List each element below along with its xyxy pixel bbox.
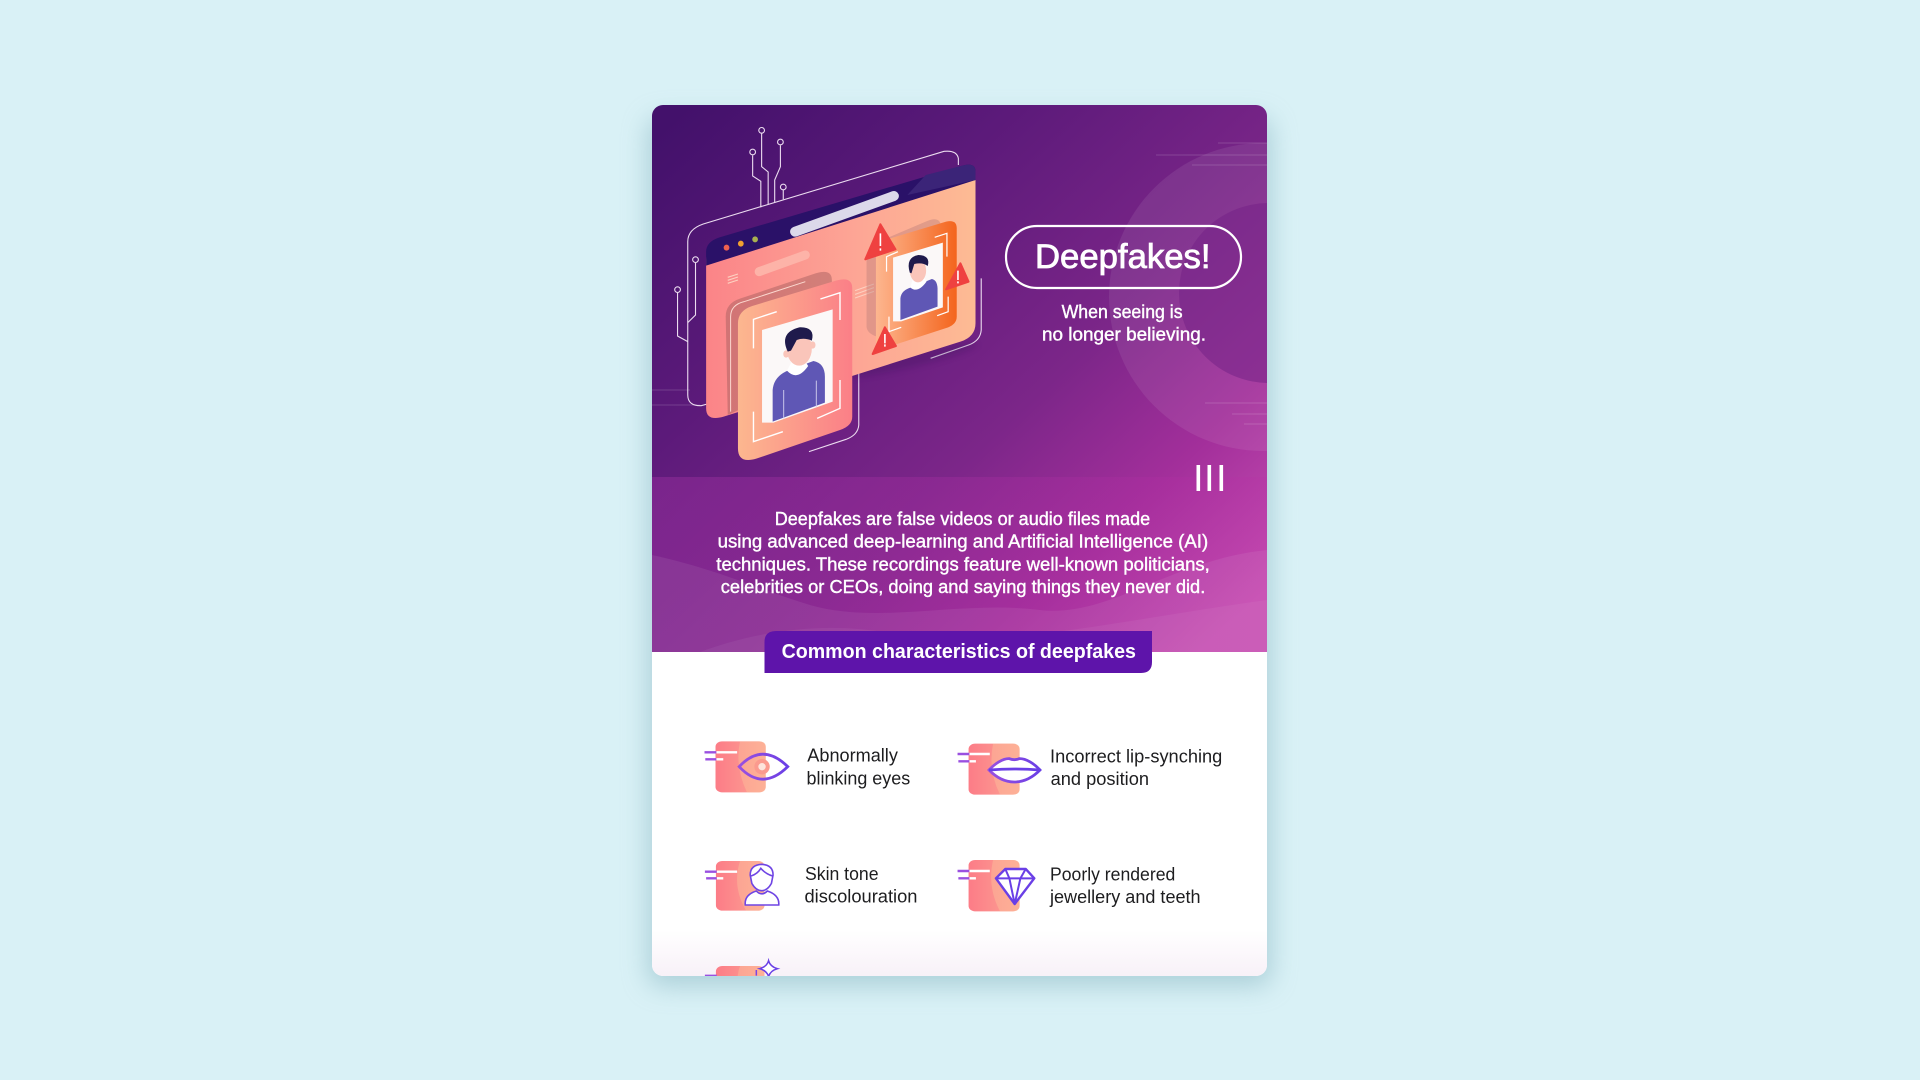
window dots [724,236,758,251]
window shadow [855,342,975,380]
tagline: When seeing is [1062,302,1183,322]
title pill [1006,226,1241,288]
pill outline [1006,226,1241,288]
infographic card [652,105,1267,976]
label: eyes [806,745,910,788]
decorative inner circle [1179,203,1267,383]
icon: diamond [958,860,1034,911]
characteristics icons [704,741,1040,1006]
icon: eye [704,741,788,792]
label: jewellery: Poorly rendered [1050,863,1175,884]
circuit lines [675,127,981,452]
label: lips: and position [1051,768,1149,789]
icon: person [705,861,779,911]
label: lips [1050,745,1222,789]
intro paragraph: Deepfakes are false videos or audio files made [775,508,1150,529]
right card shadow [867,219,941,337]
label: jewellery: jewellery and teeth [1049,886,1201,907]
photo [762,309,833,423]
intro paragraph [716,508,1210,597]
label: skin: discolouration [804,886,918,907]
frame brackets [753,293,840,442]
label: skin: Skin tone [805,863,878,884]
small pill [759,255,805,272]
back card shadow [726,272,832,415]
heading bar [764,631,1152,673]
card bottom fade [652,957,1267,976]
label: jewellery [1049,863,1201,907]
tagline [1042,302,1206,345]
label: eyes: blinking eyes [806,767,910,788]
alert triangles [865,224,969,354]
panel: purple hero [652,105,1267,652]
orange portrait card [876,221,957,348]
intro paragraph: techniques. These recordings feature well-known politicians, [716,553,1210,574]
icon: sparkle [705,961,778,1006]
pause marks [1196,465,1223,491]
person [773,327,825,422]
icon: lips [958,744,1040,795]
browser window [706,167,976,418]
intro paragraph: celebrities or CEOs, doing and saying things they never did. [721,576,1205,597]
lower hero band [652,477,1072,652]
menu lines [728,274,874,298]
title bar [706,165,976,266]
frame brackets [887,233,948,332]
address bar [795,196,894,232]
photo [893,243,943,321]
card white body [652,640,1267,976]
title: Deepfakes! [1035,238,1210,276]
back card outline [731,282,805,412]
front portrait card [738,279,852,460]
characteristics labels [804,745,1222,907]
heading text: Common characteristics of deepfakes [782,640,1136,663]
hero gradient [652,105,1267,652]
label: lips: Incorrect lip-synching [1050,745,1222,766]
card shadow [648,118,1271,986]
title bar highlight [907,165,976,195]
decorative outer circle [1109,143,1267,451]
section heading [764,631,1152,673]
illustration: browser window with deepfake portraits [675,127,981,460]
intro paragraph: using advanced deep-learning and Artificial Intelligence (AI) [718,531,1208,552]
label: eyes: Abnormally [807,745,899,766]
speed lines [652,143,1267,424]
person [900,255,938,320]
label: skin [804,863,918,907]
hero waves [652,550,1267,652]
tagline: no longer believing. [1042,325,1206,345]
